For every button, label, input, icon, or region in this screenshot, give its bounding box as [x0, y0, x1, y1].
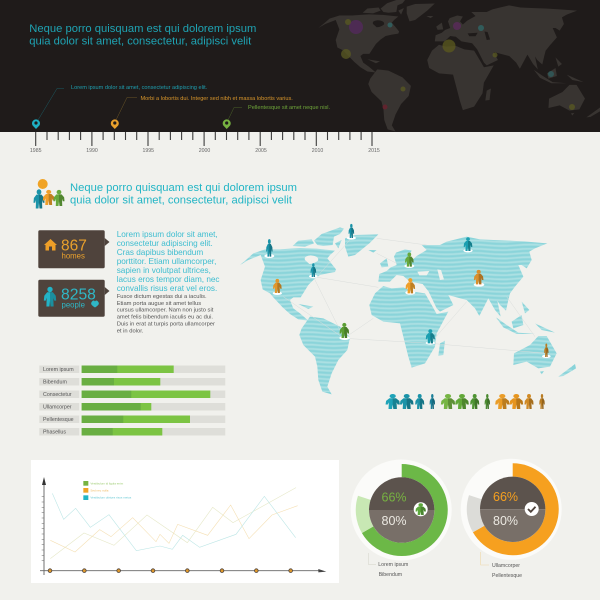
chart series: [50, 488, 298, 559]
cyan paragraph: [117, 230, 220, 293]
timeline year labels: 2000: [199, 148, 210, 154]
donut labels: orange: [481, 552, 522, 579]
bar chart: [39, 366, 225, 436]
stat box: homes: [38, 230, 109, 268]
icon: check badge: [525, 502, 539, 516]
timeline ticks: [36, 132, 372, 146]
chart legend: [83, 481, 132, 500]
stat box: homes: homes: [62, 252, 85, 260]
map person markers: [264, 224, 551, 358]
section heading: quia dolor sit amet, consectetur, adipisci velit: [70, 194, 293, 206]
bar dark segments: [82, 366, 141, 436]
donut labels: green: [368, 553, 408, 578]
stat box: people: [38, 280, 109, 317]
donut labels: orange: Ullamcorper: [492, 563, 520, 569]
bar chart: Ullamcorper: [43, 405, 72, 411]
icon: person: [44, 287, 56, 306]
section heading: Neque porro quisquam est qui dolorem ipsum: [70, 182, 297, 194]
gray paragraph: Fusce dictum egestas dui a iaculis.: [117, 294, 207, 300]
bar tracks: [82, 366, 225, 436]
gray paragraph: et in dolor.: [117, 328, 144, 334]
world map: [240, 224, 576, 394]
line chart: [40, 477, 326, 575]
timeline year labels: 1995: [143, 148, 154, 154]
stat box: homes: 867: [61, 237, 87, 254]
timeline annotations: Morbi a lobortis dui. Integer sed nibh et massa lobortis varius.: [140, 96, 293, 102]
bar chart: Phasellus: [43, 430, 66, 436]
timeline year labels: 1990: [86, 148, 98, 154]
donut chart: orange: 66%: [493, 490, 518, 504]
icon: house: [44, 239, 57, 250]
timeline pins: [32, 119, 231, 129]
cyan paragraph: Cras dapibus bibendum: [117, 248, 203, 257]
bar chart: Consectetur: [43, 392, 72, 398]
donut chart: green: [351, 460, 452, 560]
stat box: people: 8258: [61, 286, 96, 303]
title: quia dolor sit amet, consectetur, adipisci velit: [29, 36, 252, 48]
bar chart: Pellentesque: [43, 417, 74, 423]
gray paragraph: cursus ullamcorper. Nam non justo sit: [117, 308, 214, 314]
donut chart: orange: 80%: [493, 514, 518, 528]
donut chart: orange: [461, 459, 562, 560]
striped land: [240, 227, 576, 394]
donut labels: green: Bibendum: [379, 572, 402, 578]
chart legend: Vestibulum ultrices risus metus: [90, 496, 132, 500]
cyan paragraph: lacus eros tempor diam, nec: [117, 275, 220, 284]
icon: person badge: [414, 502, 428, 516]
dark header band: [0, 0, 600, 132]
donut chart: green: 66%: [382, 490, 407, 504]
timeline year labels: 2015: [368, 148, 380, 154]
gray paragraph: [117, 294, 215, 334]
icon: family with speech bubble: [33, 179, 65, 208]
timeline year labels: 2005: [255, 148, 267, 154]
chart legend: Vestibulum id ligula enim: [90, 481, 124, 485]
icon: heart: [91, 300, 99, 308]
bar values: [82, 366, 210, 436]
timeline year labels: 2010: [312, 148, 323, 154]
cyan paragraph: convallis risus erat vel eros.: [117, 284, 217, 293]
bar chart: Bibendum: [43, 380, 67, 386]
gray paragraph: amet felis bibendum iaculis eu ac dui.: [117, 315, 213, 321]
timeline annotations: Pellentesque sit amet neque nisl.: [248, 105, 331, 111]
title: [29, 23, 256, 48]
donut chart: green: 80%: [382, 514, 407, 528]
connection lines: [283, 238, 546, 353]
chart axes: [40, 477, 326, 575]
donut labels: green: Lorem ipsum: [378, 562, 408, 568]
bar labels: [39, 366, 79, 436]
cyan paragraph: consectetur adipiscing elit.: [117, 239, 213, 248]
timeline year labels: [30, 148, 380, 154]
stat box: people: people: [62, 300, 85, 310]
timeline annotations: Lorem ipsum dolor sit amet, consectetur adipiscing elit.: [71, 85, 208, 91]
donut labels: orange: Pellentesque: [492, 573, 522, 579]
bar chart: Lorem ipsum: [43, 367, 74, 373]
gray paragraph: Etiam porta augue sit amet tellus: [117, 301, 201, 307]
section heading: [70, 182, 297, 206]
dark world map: [318, 0, 600, 131]
line chart panel: [31, 460, 339, 583]
cyan paragraph: porttitor. Etiam ullamcorper,: [117, 257, 216, 266]
gray paragraph: Duis in erat at turpis porta ullamcorper: [117, 321, 215, 327]
cyan paragraph: sapien in volutpat ultrices,: [117, 266, 211, 275]
chart legend: Sed nec nulla: [90, 489, 109, 493]
cyan paragraph: Lorem ipsum dolor sit amet,: [117, 230, 218, 239]
timeline annotations: [38, 85, 331, 120]
timeline year labels: 1985: [30, 148, 42, 154]
title: Neque porro quisquam est qui dolorem ipsum: [29, 23, 256, 35]
people legend row: [386, 394, 545, 409]
chart axis markers: [48, 569, 292, 572]
